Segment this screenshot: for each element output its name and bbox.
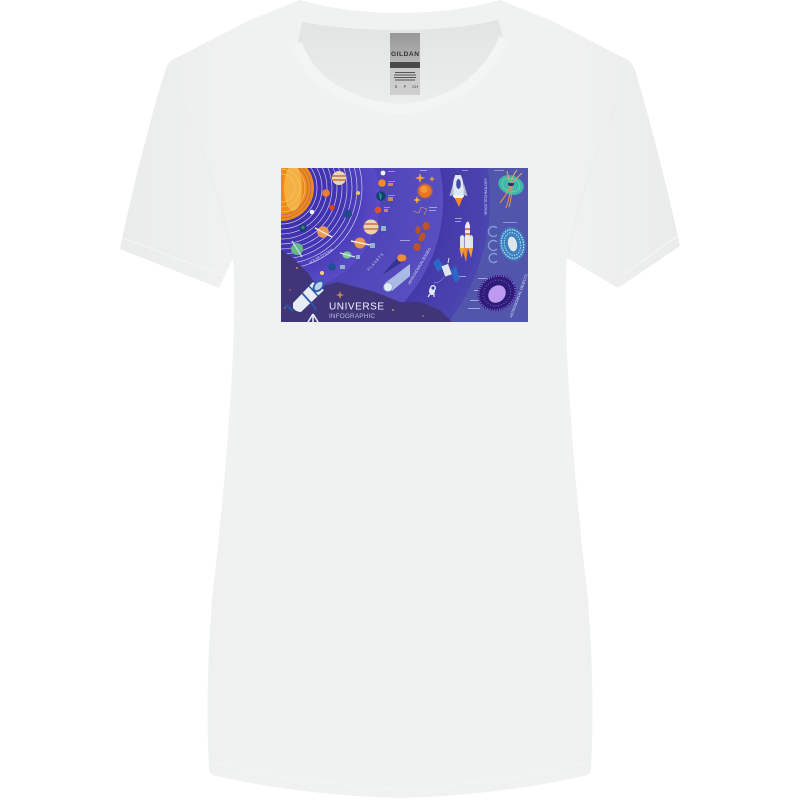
title [329, 302, 384, 320]
tag brand: GILDAN [391, 51, 419, 58]
astronaut [428, 285, 436, 297]
left sleeve seam [167, 72, 233, 258]
orange star lower [413, 196, 421, 204]
tag sizes: CH [412, 84, 418, 89]
tag sizes [395, 84, 418, 89]
galaxy type icons [488, 227, 497, 262]
venus [378, 179, 386, 187]
yellow dwarf [320, 271, 324, 275]
label: space technology: SPACE TECHNOLOGY [484, 178, 488, 215]
comet orange [382, 254, 405, 275]
label: solar system: SOLAR SYSTEM [308, 248, 334, 265]
inner back neck [298, 20, 503, 103]
neck tag [390, 33, 420, 95]
saturn [315, 226, 332, 238]
ringed green planet [340, 251, 355, 259]
tag care text [394, 72, 416, 80]
rocket one [450, 170, 468, 207]
label: astronomical bodies: ASTRONOMICAL BODIES [407, 247, 432, 286]
constellation [413, 207, 427, 215]
black hole [496, 170, 526, 208]
spiral galaxy [496, 225, 529, 263]
label: planets: PLANETS [367, 252, 385, 272]
small captions [340, 170, 517, 309]
solar system orbits [281, 168, 362, 266]
title sub: INFOGRAPHIC [329, 313, 375, 320]
white planet [310, 210, 314, 214]
printed infographic panel [281, 168, 528, 322]
left sleeve hem [123, 238, 224, 276]
mars [375, 207, 381, 213]
stars and sun [413, 173, 435, 215]
comet white [384, 264, 410, 291]
glowing sun [417, 183, 433, 199]
white neck opening [300, 0, 500, 13]
neptune [344, 210, 352, 218]
solar system planets [291, 171, 360, 257]
orange star small [429, 176, 435, 182]
tag sizes: S [395, 84, 398, 89]
orange planet [322, 189, 330, 197]
tag dark band [390, 62, 420, 68]
telescope [286, 277, 327, 322]
band: technology [404, 168, 490, 320]
hill sparkles [284, 267, 424, 317]
striped giant [364, 220, 378, 234]
panel background [450, 168, 528, 322]
blue planet [328, 263, 336, 271]
dark hill [281, 250, 452, 322]
yellow planet [356, 191, 360, 195]
title main: UNIVERSE [329, 302, 384, 312]
orange star large [415, 173, 425, 183]
right sleeve hem [622, 236, 677, 276]
bottom hem [209, 762, 591, 788]
satellite [433, 258, 460, 283]
front collar rib [297, 38, 504, 109]
asteroids [400, 222, 430, 261]
rocket two [460, 222, 473, 262]
band: bodies [324, 168, 443, 302]
uranus [291, 241, 303, 257]
red planet [329, 205, 335, 210]
moon [381, 171, 385, 175]
label: astronomical objects: ASTRONOMICAL OBJECTS [509, 273, 529, 318]
band: planets [281, 168, 380, 283]
sun [281, 168, 314, 221]
tag sizes: P [404, 84, 407, 89]
planets column [320, 171, 386, 275]
t-shirt [120, 0, 680, 798]
section labels [308, 178, 529, 318]
nebula [471, 268, 523, 318]
ringed orange planet [351, 238, 370, 248]
shirt body and sleeves [120, 0, 680, 798]
earth [299, 224, 307, 232]
jupiter [332, 171, 346, 185]
right sleeve seam [567, 72, 633, 258]
globe [376, 191, 386, 201]
